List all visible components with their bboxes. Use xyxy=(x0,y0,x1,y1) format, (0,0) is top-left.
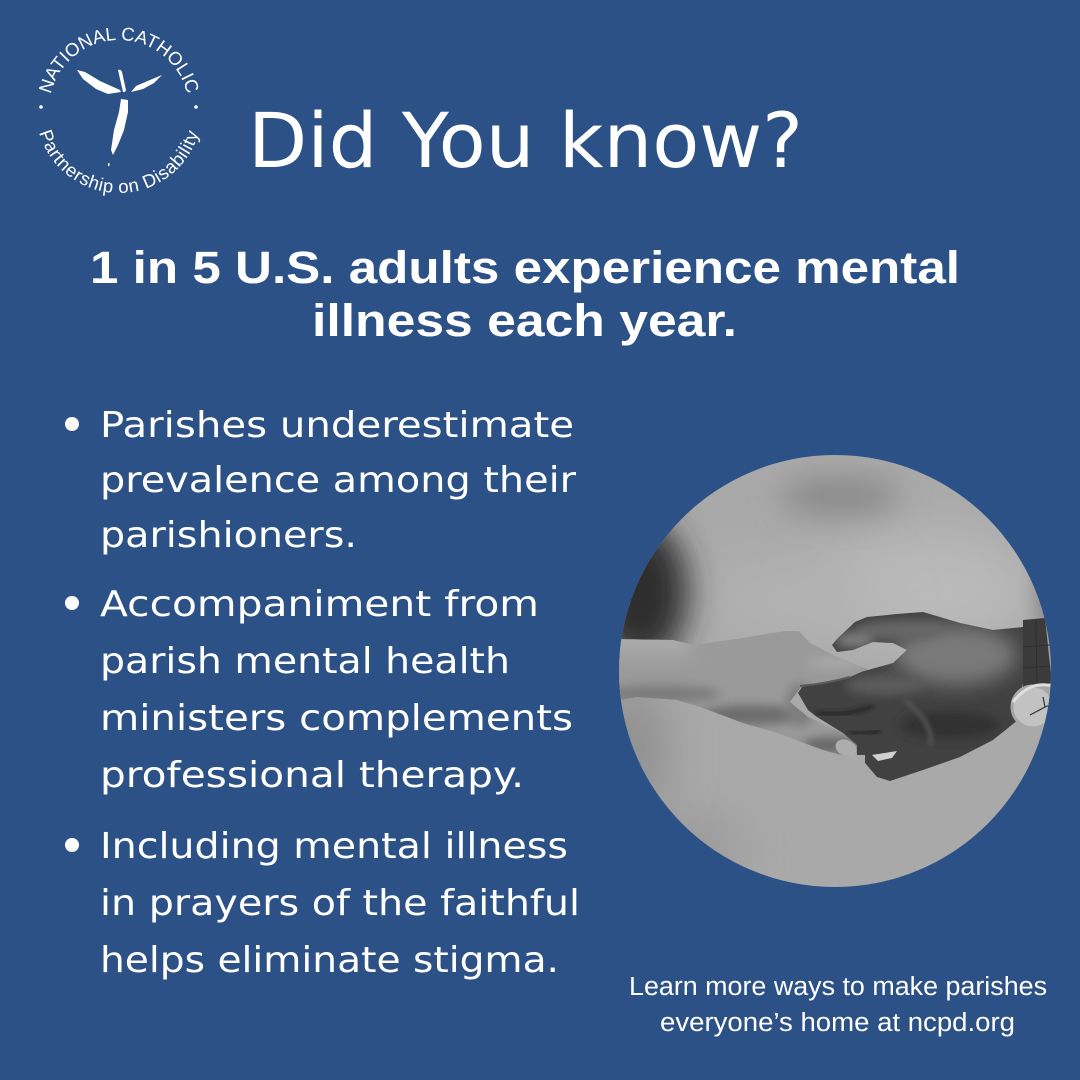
logo separator dots xyxy=(39,105,198,109)
left thumb nail xyxy=(836,739,856,756)
index finger shadow xyxy=(800,677,850,686)
logo figure mark xyxy=(77,70,162,166)
headline line 1: 1 in 5 U.S. adults experience mental xyxy=(90,242,960,293)
bullet 1 xyxy=(65,405,576,556)
bullet 2: ministers complements xyxy=(100,698,573,739)
logo bottom arc text: Partnership on Disability xyxy=(39,130,200,196)
watch band xyxy=(1023,618,1052,688)
logo top arc text: NATIONAL CATHOLIC xyxy=(38,28,198,93)
headline line 2: illness each year. xyxy=(312,295,737,346)
left hand xyxy=(619,631,868,757)
footer call to action xyxy=(629,973,1047,1037)
bullet 2: Accompaniment from xyxy=(100,584,539,625)
photo: two hands clasping in a circle xyxy=(619,455,1051,887)
title: Did You know? xyxy=(248,96,803,185)
watch face xyxy=(1012,685,1054,728)
right hand xyxy=(798,612,1023,781)
bullet 1: prevalence among their xyxy=(100,460,576,501)
footer line 1: Learn more ways to make parishes xyxy=(629,973,1047,1001)
bullet 3: in prayers of the faithful xyxy=(100,883,580,924)
bullet 3: Including mental illness xyxy=(100,826,568,867)
headline statistic xyxy=(90,242,960,346)
bullet 2 xyxy=(65,584,573,796)
bullet 1: Parishes underestimate xyxy=(100,405,574,446)
bullet 3: helps eliminate stigma. xyxy=(100,940,559,981)
bullet 3 xyxy=(65,826,580,981)
bullet 2: professional therapy. xyxy=(100,755,524,796)
logo: National Catholic Partnership on Disability xyxy=(38,28,200,196)
bullet 1: parishioners. xyxy=(100,515,357,556)
bullet list xyxy=(65,405,580,981)
highlight between fingers xyxy=(872,751,897,761)
footer line 2: everyone’s home at ncpd.org xyxy=(660,1009,1015,1037)
photo background xyxy=(619,455,1051,887)
bullet 2: parish mental health xyxy=(100,641,510,682)
